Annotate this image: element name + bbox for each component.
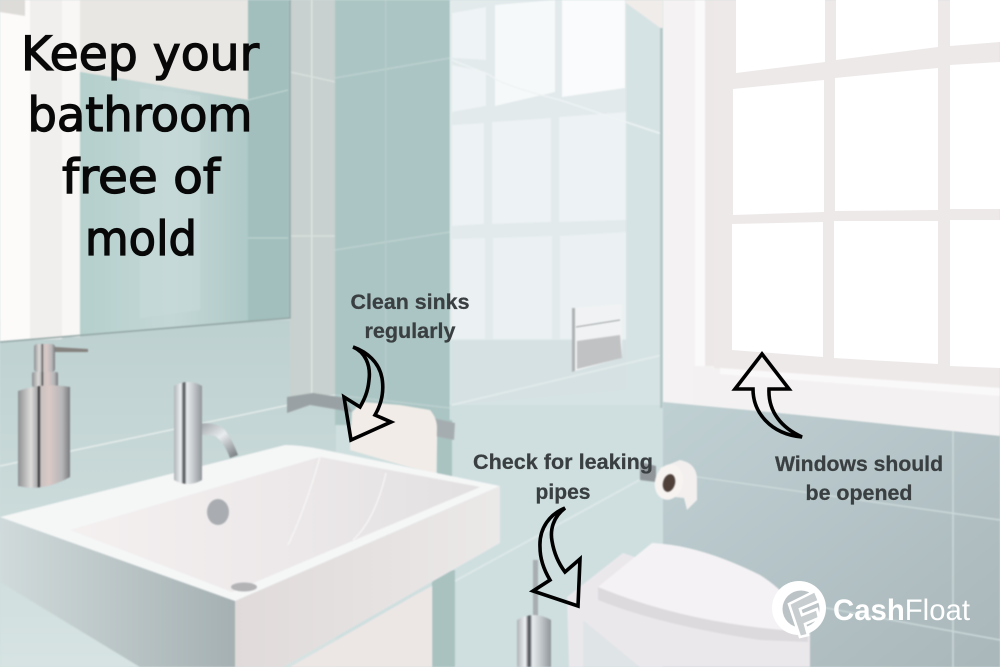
flush plate	[572, 304, 622, 372]
callout: windows should be opened: Windows should	[775, 452, 943, 476]
title: Keep your bathroom free of mold: bathroom	[28, 88, 252, 143]
towel rail	[287, 393, 455, 440]
callout: check for leaking pipes	[473, 450, 653, 504]
callout: clean sinks regularly: regularly	[364, 319, 456, 343]
arrow: toward towel and sink	[344, 347, 391, 440]
toilet	[567, 543, 810, 667]
callout: windows should be opened	[775, 452, 943, 505]
towel	[350, 402, 437, 475]
soap dispenser	[18, 344, 88, 488]
sink	[0, 445, 500, 667]
mirror	[0, 0, 290, 342]
callout: clean sinks regularly: Clean sinks	[350, 290, 470, 314]
arrow: toward window	[735, 354, 802, 437]
title: Keep your bathroom free of mold: Keep your	[21, 27, 260, 82]
logo mark	[772, 581, 826, 637]
callout: clean sinks regularly	[350, 290, 470, 343]
background: wall beneath window	[663, 400, 1000, 667]
callout: check for leaking pipes: pipes	[536, 480, 591, 504]
toilet brush holder	[517, 560, 551, 667]
background: lower central tiled wall	[432, 400, 663, 667]
arrow: toward toilet pipes	[533, 508, 580, 606]
toilet paper roll	[640, 460, 697, 510]
title: Keep your bathroom free of mold: mold	[85, 212, 197, 267]
hand towel under sink	[290, 586, 432, 667]
window panes	[732, 0, 1000, 368]
background: glass panel with window reflection	[450, 0, 663, 408]
tap	[174, 382, 238, 484]
background: dark teal wall tile	[335, 0, 450, 425]
logo: CashFloat	[772, 581, 971, 637]
window frame and sill	[663, 0, 1000, 436]
callout: windows should be opened: be opened	[806, 481, 912, 505]
logo wordmark: CashFloat	[833, 594, 971, 627]
title: Keep your bathroom free of mold	[21, 27, 260, 267]
callout: check for leaking pipes: Check for leaking	[473, 450, 653, 474]
title: Keep your bathroom free of mold: free of	[62, 150, 221, 205]
